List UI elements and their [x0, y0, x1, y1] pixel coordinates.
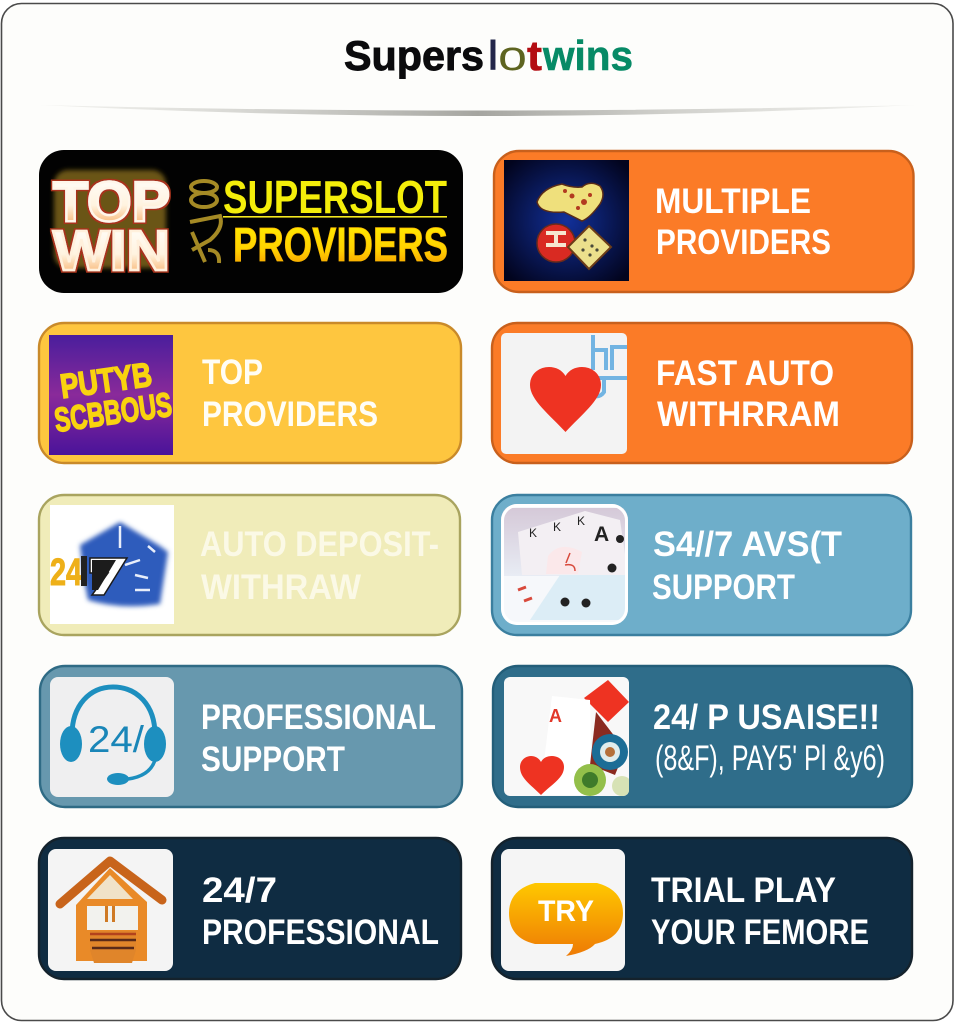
icon: top win badge	[53, 170, 170, 283]
superslot wordmark: SUPERSLOT	[223, 171, 447, 223]
label: trial play your femore: YOUR FEMORE	[651, 913, 869, 952]
label: professional support: SUPPORT	[201, 740, 345, 779]
label: multiple providers: PROVIDERS	[656, 223, 831, 262]
title: Superslotwins logo: o	[498, 32, 527, 79]
title: Superslotwins logo: l	[488, 32, 498, 79]
label: fast auto withrram: WITHRRAM	[657, 395, 840, 434]
label: trial play your femore: TRIAL PLAY	[651, 871, 836, 910]
icon: gold ornament	[190, 181, 221, 263]
panel: 24/7 professional	[39, 838, 461, 979]
panel: top providers	[39, 323, 461, 463]
title: Superslotwins logo: wins	[542, 32, 633, 79]
label: fast auto withrram	[656, 354, 840, 434]
label: professional support	[201, 698, 436, 779]
icon: food tiles on navy	[504, 160, 629, 281]
label: 24/7 professional: PROFESSIONAL	[202, 913, 439, 952]
header divider	[40, 105, 915, 116]
panel: trial play	[492, 838, 912, 979]
icon: playing cards: A	[594, 523, 609, 546]
icon: playing cards: K	[529, 526, 537, 540]
label: auto deposit withdraw	[200, 525, 439, 607]
icon: TRY speech bubble: TRY	[538, 895, 594, 928]
title: Superslotwins logo	[344, 32, 633, 79]
label: fast auto withrram: FAST AUTO	[656, 354, 834, 393]
label: trial play your femore	[651, 871, 869, 952]
label: 24/7 professional	[202, 871, 439, 952]
title: Superslotwins logo: Supers	[344, 32, 484, 79]
icon: TRY speech bubble	[501, 849, 625, 971]
panel: professional support	[40, 666, 462, 807]
label: 24/7 support garbled: S4//7 AVS(T	[653, 525, 842, 564]
icon: headset 24/	[50, 677, 174, 797]
label: 24/ pusaise garbled: 24/ P USAISE!!	[653, 698, 880, 737]
icon: headset 24/: 24/	[88, 719, 145, 760]
icon: top win badge: WIN	[53, 219, 170, 283]
label: multiple providers: MULTIPLE	[655, 182, 811, 221]
icon: purple game tile	[49, 335, 174, 455]
icon: 24/7 blue house	[50, 505, 174, 624]
icon: cards and chips: A	[549, 706, 562, 726]
panel: 24/7 pay and play	[493, 666, 912, 807]
icon: purple game tile: SCBBOUS	[52, 386, 174, 440]
label: 24/7 support garbled: SUPPORT	[652, 568, 795, 607]
icon: playing cards: K	[553, 520, 561, 534]
icon: purple game tile: PUTYB	[58, 356, 154, 406]
panel: 24/7 support	[492, 495, 911, 635]
label: 24/7 professional: 24/7	[202, 871, 277, 910]
icon: cards and chips	[504, 677, 632, 796]
providers wordmark: PROVIDERS	[233, 219, 448, 272]
panel: auto deposit withdraw	[39, 495, 460, 635]
label: auto deposit withdraw: WITHRAW	[201, 568, 361, 607]
label: multiple providers	[655, 182, 831, 262]
label: top providers: PROVIDERS	[202, 395, 378, 434]
icon: 24/7 blue house: 24	[50, 552, 82, 594]
panel: fast auto withdraw	[492, 323, 912, 463]
label: 24/ pusaise garbled	[653, 698, 885, 778]
icon: playing cards	[501, 504, 628, 625]
icon: top win badge: TOP	[53, 170, 170, 234]
label: top providers: TOP	[202, 353, 263, 392]
label: 24/7 support garbled	[652, 525, 842, 607]
title: Superslotwins logo: t	[527, 32, 542, 79]
icon: playing cards: K	[577, 514, 585, 528]
panel: multiple providers	[494, 151, 914, 292]
icon: orange house	[48, 849, 173, 971]
label: professional support: PROFESSIONAL	[201, 698, 436, 737]
label: auto deposit withdraw: AUTO DEPOSIT-	[200, 525, 439, 564]
icon: heart tile	[501, 333, 627, 454]
label: top providers	[202, 353, 378, 434]
panel: top win superslot providers banner	[39, 150, 463, 293]
